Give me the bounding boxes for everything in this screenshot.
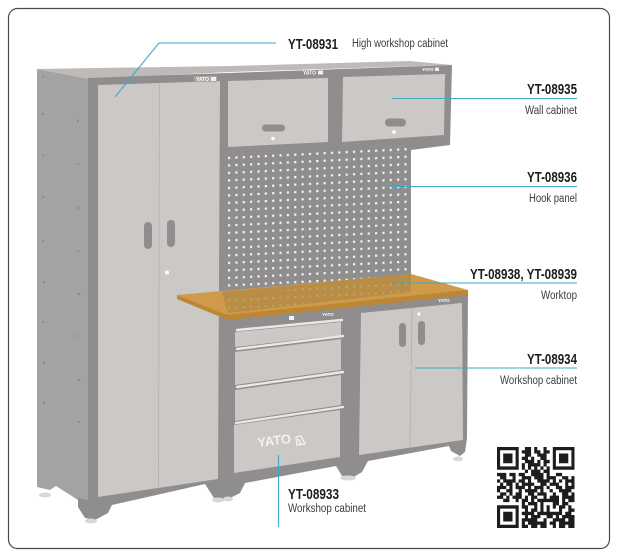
top surface [37, 61, 452, 79]
callout: YT-08936 [390, 169, 577, 205]
YATO badges: wall cabinets: YATO [422, 67, 434, 72]
YATO badge: high cabinet: YATO [196, 77, 209, 83]
callout: YT-08934: Workshop cabinet [500, 375, 578, 387]
front frame silhouette [78, 65, 468, 520]
callout: YT-08931: YT-08931 [288, 36, 338, 53]
hook panel with perforations [228, 146, 408, 294]
callout: YT-08935: YT-08935 [527, 81, 577, 98]
high cabinet doors [98, 81, 220, 497]
wall cabinet right door [342, 74, 445, 142]
lower right cabinet doors [359, 298, 463, 455]
illustration: workshop furniture set [37, 61, 468, 524]
callout: YT-08931 [115, 36, 449, 97]
YATO badge: high cabinet [194, 76, 217, 83]
YATO badges: wall cabinets [303, 67, 439, 76]
lower right cabinet doors: YATO [438, 298, 450, 303]
QR code [497, 449, 574, 526]
callout: YT-08931: High workshop cabinet [352, 38, 449, 50]
callout: YT-08933: YT-08933 [288, 486, 339, 503]
lower drawer cabinet: drawers: YATO [257, 431, 292, 450]
callout: YT-08935 [392, 81, 578, 117]
callout: YT-08933 [278, 455, 367, 527]
callout: YT-08935: Wall cabinet [525, 105, 578, 117]
high cabinet side panel [37, 69, 90, 506]
callout: YT-08938, YT-08939 [393, 266, 577, 302]
callout: YT-08934 [415, 351, 578, 387]
callout: YT-08938, YT-08939: YT-08938, YT-08939 [470, 266, 577, 283]
worktop [177, 274, 468, 320]
callout: YT-08936: Hook panel [529, 193, 577, 205]
lower drawer cabinet: drawers [234, 312, 343, 473]
callout: YT-08933: Workshop cabinet [288, 503, 367, 515]
YATO badges: wall cabinets: YATO [303, 70, 316, 76]
callout: YT-08934: YT-08934 [527, 351, 578, 368]
wall cabinet left door [228, 78, 328, 147]
levelling feet [39, 456, 463, 524]
callout: YT-08936: YT-08936 [527, 169, 577, 186]
lower drawer cabinet: drawers: YATO [322, 312, 334, 317]
callout: YT-08938, YT-08939: Worktop [541, 290, 577, 302]
